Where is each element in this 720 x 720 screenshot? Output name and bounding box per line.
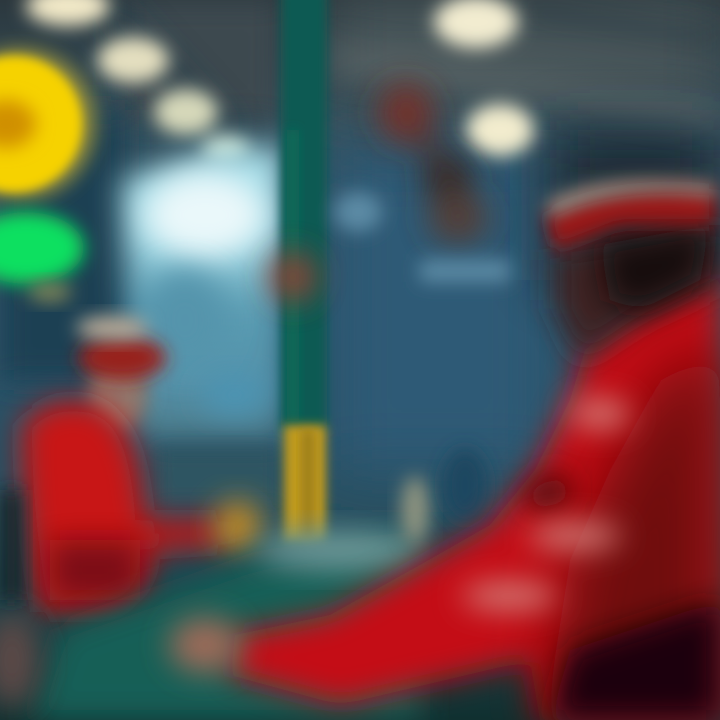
workbench and floor [0, 449, 487, 720]
ceiling beams [90, 0, 720, 135]
ceiling lights [26, 0, 534, 165]
bright window [122, 145, 285, 505]
head and neck [555, 225, 715, 360]
foreground worker in red [169, 180, 720, 720]
sleeve reflective stripes [462, 400, 630, 609]
distant hanging objects [269, 83, 488, 303]
cap [545, 188, 715, 250]
worker body and arm [230, 270, 720, 720]
green sign [0, 212, 84, 302]
wall markings [334, 192, 510, 282]
teal and yellow column [281, 0, 327, 543]
background worker in red [22, 316, 262, 612]
hand [169, 617, 241, 673]
yellow round sign [0, 48, 96, 200]
